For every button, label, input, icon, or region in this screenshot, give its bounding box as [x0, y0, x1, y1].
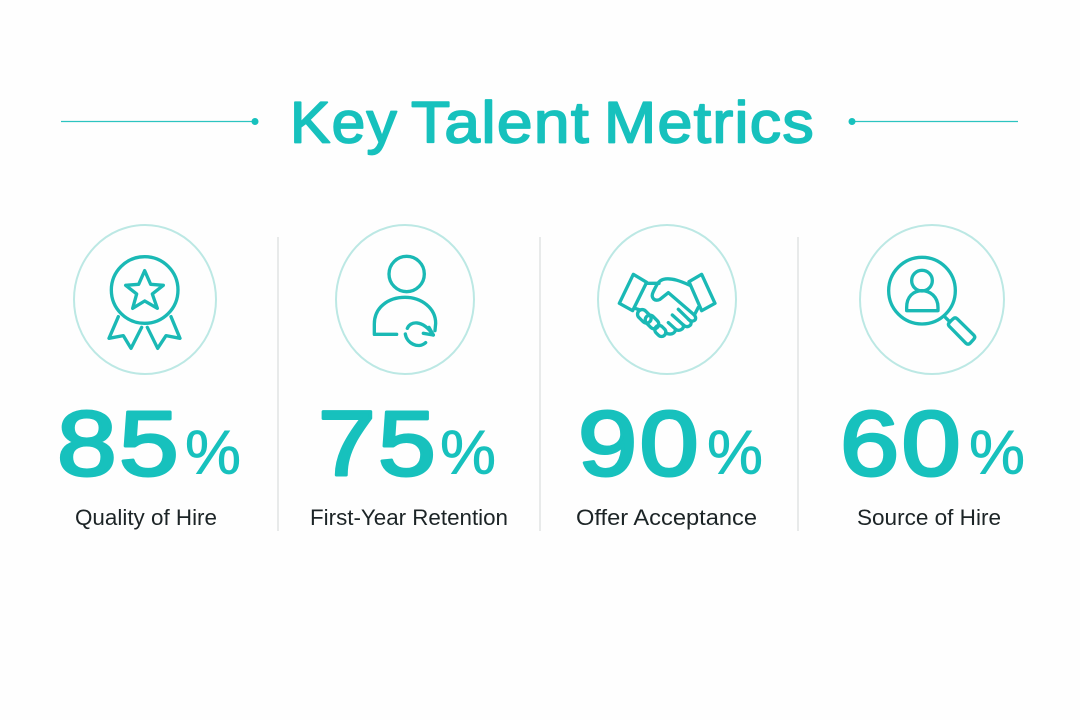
- metric label: First-Year Retention: [310, 505, 508, 530]
- icon: award ribbon: [74, 225, 216, 374]
- title: [290, 90, 815, 156]
- panel: source of hire: [840, 225, 1025, 530]
- metric value 75%: [318, 393, 496, 495]
- icon: person with refresh arrow: [336, 225, 474, 374]
- header: [61, 90, 1018, 156]
- title: Metrics: [604, 90, 815, 156]
- metric value 60%: %: [969, 418, 1025, 488]
- metric value 75%: 75: [318, 393, 438, 495]
- panel: quality of hire: [57, 225, 241, 530]
- metric value 85%: [57, 393, 241, 495]
- metric label: Source of Hire: [857, 505, 1001, 530]
- metric value 90%: %: [707, 418, 763, 488]
- metric label: Quality of Hire: [75, 505, 217, 530]
- metric value 75%: %: [440, 418, 496, 488]
- panel: offer acceptance: [576, 225, 763, 530]
- metric value 85%: %: [185, 418, 241, 488]
- metric label: Offer Acceptance: [576, 505, 757, 530]
- metric value 85%: 85: [57, 393, 181, 495]
- title: Key: [290, 90, 398, 156]
- metric value 60%: [840, 393, 1025, 495]
- icon: magnifier over person: [860, 225, 1004, 374]
- left title rule: [61, 118, 258, 125]
- metric value 90%: [578, 393, 763, 495]
- metric value 60%: 60: [840, 393, 963, 495]
- metric value 90%: 90: [578, 393, 701, 495]
- icon: handshake: [598, 225, 736, 374]
- panel: first-year retention: [310, 225, 508, 530]
- right title rule: [848, 118, 1018, 125]
- title: Talent: [411, 90, 590, 156]
